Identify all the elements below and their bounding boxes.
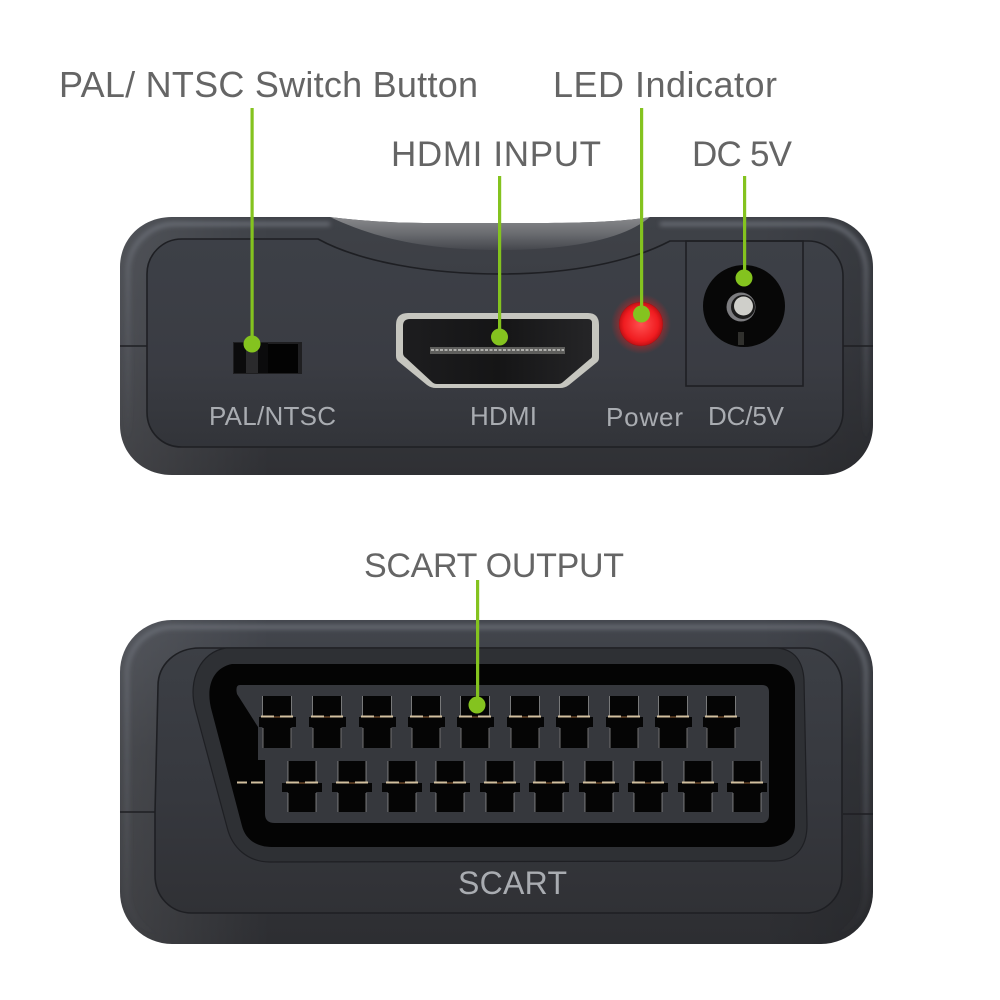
heading: SCART OUTPUT bbox=[364, 547, 624, 585]
callout: SCART output bbox=[364, 547, 624, 714]
leader line bbox=[468, 580, 486, 714]
device body: bottom bbox=[120, 620, 873, 944]
leader line bbox=[244, 108, 260, 352]
HDMI port bbox=[396, 313, 599, 388]
device: SCART output side bbox=[120, 620, 873, 944]
callout: LED indicator bbox=[553, 64, 777, 322]
black recess bbox=[209, 664, 795, 847]
printed label: Power: Power bbox=[606, 402, 683, 432]
printed label: SCART: SCART bbox=[458, 865, 567, 901]
power LED bbox=[611, 294, 671, 354]
heading: DC 5V bbox=[692, 135, 793, 174]
PAL/NTSC slide switch bbox=[233, 342, 302, 374]
printed label: PAL/NTSC: PAL/NTSC bbox=[209, 401, 336, 431]
printed label: HDMI: HDMI bbox=[470, 401, 537, 431]
callout: PAL/NTSC switch button bbox=[59, 64, 478, 352]
bottom row of pins bbox=[282, 761, 767, 812]
inner face panel bbox=[147, 239, 843, 447]
device: HDMI input side bbox=[120, 217, 873, 475]
DC power jack bbox=[703, 265, 785, 347]
SCART connector shell bbox=[193, 648, 807, 862]
callout: HDMI input bbox=[391, 135, 601, 346]
top row of pins bbox=[259, 696, 740, 748]
device body: top bbox=[120, 217, 873, 475]
callout: DC 5V bbox=[692, 135, 793, 286]
leader line bbox=[736, 176, 752, 286]
leader line bbox=[491, 176, 508, 346]
leader line bbox=[633, 108, 650, 322]
recessed top wedge bbox=[330, 217, 650, 250]
contact carrier bbox=[236, 685, 769, 823]
heading: PAL/ NTSC Switch Button bbox=[59, 64, 478, 105]
heading: LED Indicator bbox=[553, 64, 777, 105]
DC jack housing bbox=[686, 241, 803, 386]
inner face panel bbox=[155, 648, 842, 913]
printed label: DC/5V: DC/5V bbox=[708, 401, 785, 431]
heading: HDMI INPUT bbox=[391, 135, 601, 174]
